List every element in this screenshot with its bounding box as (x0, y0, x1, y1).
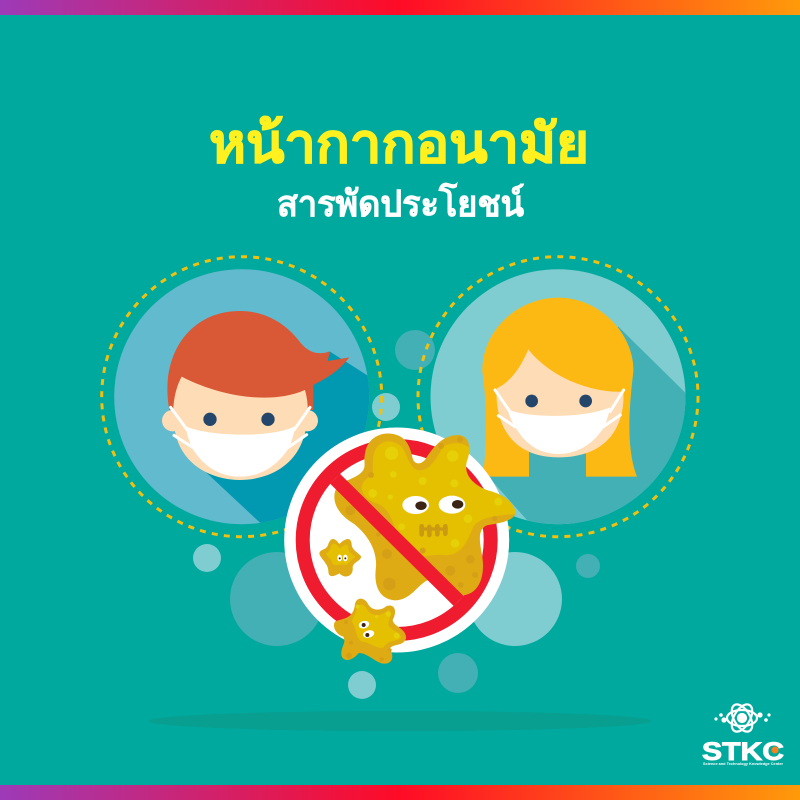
boy hair (167, 311, 349, 410)
logo atom icon (727, 701, 757, 735)
bottom gradient bar (0, 785, 800, 800)
dashed ring: boy (102, 257, 382, 537)
girl eyes (525, 395, 592, 407)
prohibition sign with germs (284, 428, 520, 664)
girl mask (495, 390, 624, 454)
logo orange dot (772, 746, 778, 754)
large germ eyes (402, 496, 465, 514)
sign white disc (284, 428, 509, 652)
boy face (173, 377, 308, 480)
logo tagline: Science and Technology Knowledge Center (703, 762, 784, 766)
large germ (334, 434, 520, 600)
upper small germ (319, 539, 361, 577)
panel: girl with mask (430, 269, 686, 524)
sign red ring (303, 446, 491, 634)
sign red slash (335, 479, 459, 601)
top gradient bar (0, 0, 800, 15)
STKC logo (702, 701, 784, 766)
ground shadow (149, 711, 651, 731)
boy mask (171, 407, 310, 477)
girl hair (482, 298, 637, 477)
panel: boy with mask (114, 269, 370, 524)
subtitle: สารพัดประโยชน์ (277, 182, 524, 224)
background bubbles (193, 330, 600, 699)
title: หน้ากากอนามัย (209, 114, 589, 174)
girl face (497, 349, 623, 457)
lower small germ (334, 599, 406, 664)
logo dots (714, 712, 771, 723)
dashed ring: girl (418, 257, 698, 537)
large germ mouth (419, 524, 448, 537)
boy ears (162, 410, 318, 431)
boy eyes (203, 413, 275, 426)
logo wordmark: STKC (702, 738, 784, 766)
